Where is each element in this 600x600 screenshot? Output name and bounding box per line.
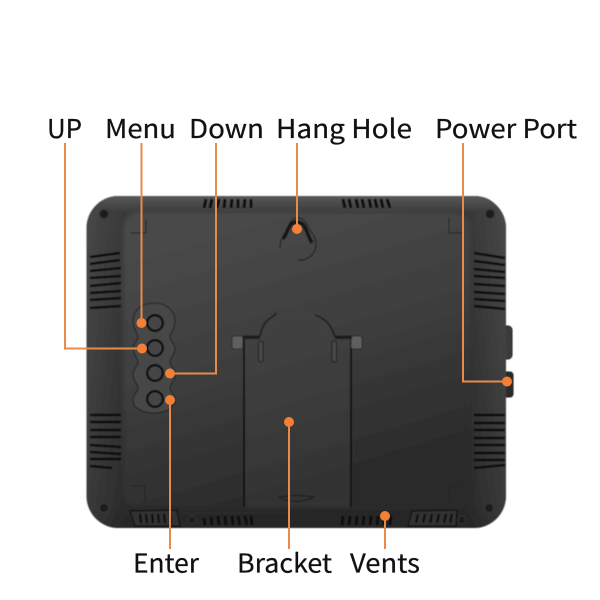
- leader: Vents: [380, 511, 390, 549]
- leader: Power Port: [463, 143, 512, 386]
- bracket hinges: [232, 336, 362, 362]
- corner screws: [100, 210, 494, 524]
- vents: left and right sides: [90, 253, 505, 468]
- label: Vents: Vents: [350, 544, 420, 580]
- corner marks: [131, 218, 464, 503]
- bracket: [232, 313, 362, 507]
- inner panel: [123, 212, 470, 507]
- label: UP: UP: [47, 109, 82, 146]
- vents: bottom: [130, 510, 457, 526]
- label: Power Port: Power Port: [435, 109, 577, 146]
- leader: Down: [165, 143, 216, 378]
- leader: UP: [65, 143, 147, 354]
- label: Enter: Enter: [133, 544, 200, 580]
- leader: Enter: [165, 395, 175, 549]
- leader: Menu: [136, 143, 146, 328]
- vents: top: [204, 199, 390, 208]
- label: Bracket: Bracket: [237, 544, 332, 580]
- side tabs: [502, 326, 513, 397]
- label: Down: Down: [189, 109, 264, 146]
- leader: Bracket: [284, 417, 294, 549]
- label: Menu: Menu: [105, 109, 176, 146]
- leader: Hang Hole: [292, 143, 302, 234]
- button cluster: [133, 303, 175, 413]
- device back housing: [86, 196, 513, 528]
- label: Hang Hole: Hang Hole: [276, 109, 412, 146]
- hang hole: [280, 218, 316, 260]
